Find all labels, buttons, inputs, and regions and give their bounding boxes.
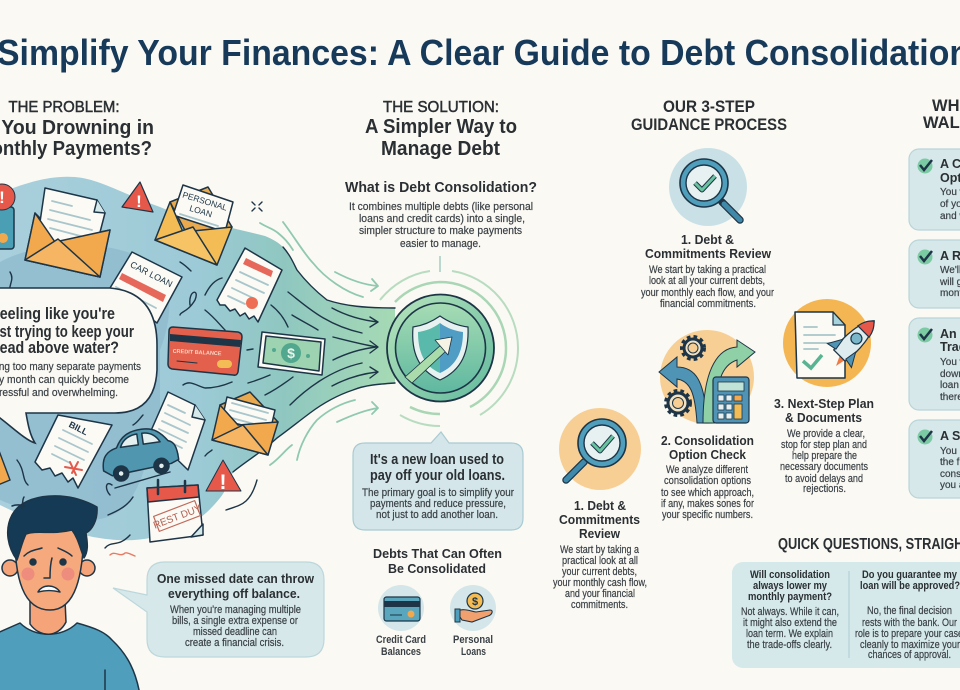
- speech bubble: feeling like you're: [0, 288, 157, 443]
- step: debt and commitments review (lower): and your financial: [565, 588, 635, 600]
- step: next-step plan and documents: [774, 299, 886, 495]
- step: debt and commitments review (top): your monthly each flow, and your: [641, 287, 774, 299]
- heading: debts that can be consolidated: Debts That Can Often: [373, 546, 502, 561]
- callout: new loan: not just to add another loan.: [376, 509, 498, 521]
- heading: the solution: THE SOLUTION:: [383, 99, 499, 116]
- icon: calendar stamp: REST DUY: [152, 503, 203, 532]
- text block: what is debt consolidation: It combines multiple debts (like personal: [349, 201, 533, 213]
- step: consolidation option check: to see which approach,: [661, 487, 754, 499]
- heading: the problem: [0, 99, 154, 160]
- heading: debts that can be consolidated: [373, 546, 502, 576]
- heading: the solution: Manage Debt: [381, 138, 500, 160]
- step: next-step plan and documents: stop for step plan and: [781, 439, 867, 451]
- text block: what is debt consolidation: simpler structure to make payments: [359, 225, 522, 237]
- faq: guarantee: [855, 569, 960, 661]
- flow lines toward the emblem: [10, 202, 378, 556]
- step: consolidation option check: [659, 330, 755, 521]
- faq: lower payment: Will consolidation: [750, 569, 830, 581]
- faq: lower payment: [741, 569, 839, 651]
- worried man illustration: [0, 496, 140, 690]
- step: consolidation option check: 2. Consolidation: [661, 433, 754, 448]
- icon: warning triangle lower: !: [220, 471, 226, 494]
- step: debt and commitments review (lower): Commitments: [559, 512, 640, 527]
- faq: lower payment: monthly payment?: [748, 591, 832, 603]
- card: a straight answer: [909, 420, 960, 498]
- step: debt and commitments review (lower): We start by taking a: [560, 544, 640, 556]
- step: debt and commitments review (top): financial commitments.: [660, 298, 756, 310]
- faq: lower payment: the trade-offs clearly.: [747, 639, 832, 651]
- card: an understanding of trade-offs: [909, 318, 960, 410]
- icon: calendar stamp: [147, 480, 204, 542]
- callout: missed date: bills, a single extra expense or: [172, 615, 298, 627]
- faq: lower payment: Not always. While it can,: [741, 606, 839, 618]
- step: next-step plan and documents: 3. Next-Step Plan: [774, 396, 874, 411]
- icon: personal loans: Loans: [461, 646, 486, 658]
- callout: missed date: create a financial crisis.: [185, 637, 284, 649]
- text block: what is debt consolidation: loans and credit cards) into a single,: [359, 213, 525, 225]
- icon: orange envelope: [25, 188, 110, 277]
- callout: new loan: pay off your old loans.: [370, 468, 505, 484]
- step: debt and commitments review (lower): practical look at all: [562, 555, 638, 567]
- icon: red credit card: [168, 327, 242, 375]
- icon: bill receipt: BILL: [67, 419, 90, 438]
- icon: paper sheet: [150, 392, 205, 470]
- faq: lower payment: it might also extend the: [743, 617, 837, 629]
- card: a clear picture: [909, 149, 960, 230]
- step: debt and commitments review (lower): Review: [579, 526, 621, 541]
- text block: what is debt consolidation: [345, 180, 537, 250]
- step: consolidation option check: We analyze different: [666, 464, 748, 476]
- heading: 3-step process: OUR 3-STEP: [663, 98, 755, 116]
- heading: 3-step process: [631, 98, 787, 134]
- callout: new loan: [353, 432, 523, 530]
- icon: personal loans: $: [472, 596, 478, 608]
- brows, eyes, mouth, nose: [24, 548, 72, 578]
- icon: red credit card: CREDIT BALANCE: [172, 349, 222, 357]
- icon: blue car: [99, 425, 181, 483]
- icon: receipt with red seal: [217, 248, 282, 322]
- shirt: [0, 623, 140, 690]
- step: debt and commitments review (lower): 1. Debt &: [574, 498, 626, 513]
- step: debt and commitments review (top): look at all your current debts,: [649, 275, 765, 287]
- callout: new loan: payments and reduce pressure,: [370, 498, 506, 510]
- icon: personal loan envelope: LOAN: [188, 203, 213, 219]
- icon: car loan document: CAR LOAN: [129, 259, 174, 289]
- heading: what you walk away with: [923, 97, 960, 132]
- debt wave illustration background: [0, 177, 395, 540]
- heading: the solution: [365, 99, 517, 160]
- icon: car loan document: [110, 252, 182, 323]
- icon: orange envelope edge: [0, 448, 10, 485]
- neck: [30, 600, 66, 634]
- icon: personal loan envelope: PERSONAL: [181, 190, 229, 213]
- step: debt and commitments review (lower): commitments.: [571, 599, 628, 611]
- step: debt and commitments review (lower): [553, 408, 647, 611]
- callout: missed date: everything off balance.: [168, 586, 300, 601]
- callout: new loan: It's a new loan used to: [370, 452, 504, 468]
- emblem: shield in circle: [380, 256, 518, 426]
- icon: bill receipt: [35, 415, 112, 488]
- icon: red alert circle and card: [0, 184, 15, 249]
- icon: credit card balances: Credit Card: [376, 634, 426, 646]
- step: debt and commitments review (top): 1. Debt &: [681, 232, 734, 247]
- step: next-step plan and documents: to avoid delays and: [785, 473, 863, 485]
- card: a realistic plan: [909, 240, 960, 308]
- heading: the problem: THE PROBLEM:: [8, 99, 120, 116]
- step: debt and commitments review (lower): your monthly cash flow,: [553, 577, 647, 589]
- panel: faq: [732, 562, 960, 668]
- ears: [2, 560, 18, 576]
- faq: lower payment: always lower my: [753, 580, 828, 592]
- text block: what is debt consolidation: What is Debt Consolidation?: [345, 180, 537, 196]
- step: consolidation option check: if any, makes sones for: [661, 498, 754, 510]
- hair: [8, 496, 97, 560]
- step: debt and commitments review (top): [641, 148, 774, 310]
- icon: banknote: $: [287, 345, 295, 361]
- icon: personal loans: [450, 585, 496, 658]
- step: debt and commitments review (top): We start by taking a practical: [649, 264, 766, 276]
- callout: missed date: When you're managing multiple: [170, 604, 301, 616]
- heading: the solution: A Simpler Way to: [365, 116, 517, 138]
- heading: 3-step process: GUIDANCE PROCESS: [631, 116, 787, 134]
- step: debt and commitments review (lower): your current debts,: [562, 566, 637, 578]
- step: next-step plan and documents: help prepare the: [792, 450, 857, 462]
- face: [15, 530, 84, 610]
- callout: missed date: One missed date can throw: [157, 571, 315, 586]
- text block: what is debt consolidation: easier to manage.: [400, 238, 481, 250]
- step: consolidation option check: consolidation options: [664, 475, 751, 487]
- callout: missed date: missed deadline can: [193, 626, 277, 638]
- callout: missed date: [113, 562, 324, 657]
- faq: lower payment: loan term. We explain: [746, 628, 833, 640]
- heading: debts that can be consolidated: Be Consolidated: [388, 561, 486, 576]
- step: consolidation option check: your specific numbers.: [662, 509, 753, 521]
- icon: envelope lower: [212, 392, 278, 455]
- step: consolidation option check: Option Check: [669, 447, 747, 462]
- step: next-step plan and documents: We provide a clear,: [787, 428, 865, 440]
- icon: credit card balances: Balances: [381, 646, 421, 658]
- callout: new loan: The primary goal is to simplify your: [362, 487, 514, 499]
- icon: personal loans: Personal: [453, 634, 493, 646]
- step: next-step plan and documents: rejections.: [803, 483, 846, 495]
- icon: warning triangle lower: [206, 460, 241, 494]
- step: next-step plan and documents: necessary documents: [780, 461, 868, 473]
- icon: banknote: [258, 332, 325, 375]
- icon: red warning triangle: [122, 182, 153, 212]
- icon: personal loan envelope: [155, 185, 233, 265]
- icon: credit card balances: [376, 585, 426, 658]
- step: next-step plan and documents: & Documents: [785, 410, 862, 425]
- icon: red warning triangle: !: [136, 192, 142, 211]
- step: debt and commitments review (top): Commitments Review: [645, 246, 772, 261]
